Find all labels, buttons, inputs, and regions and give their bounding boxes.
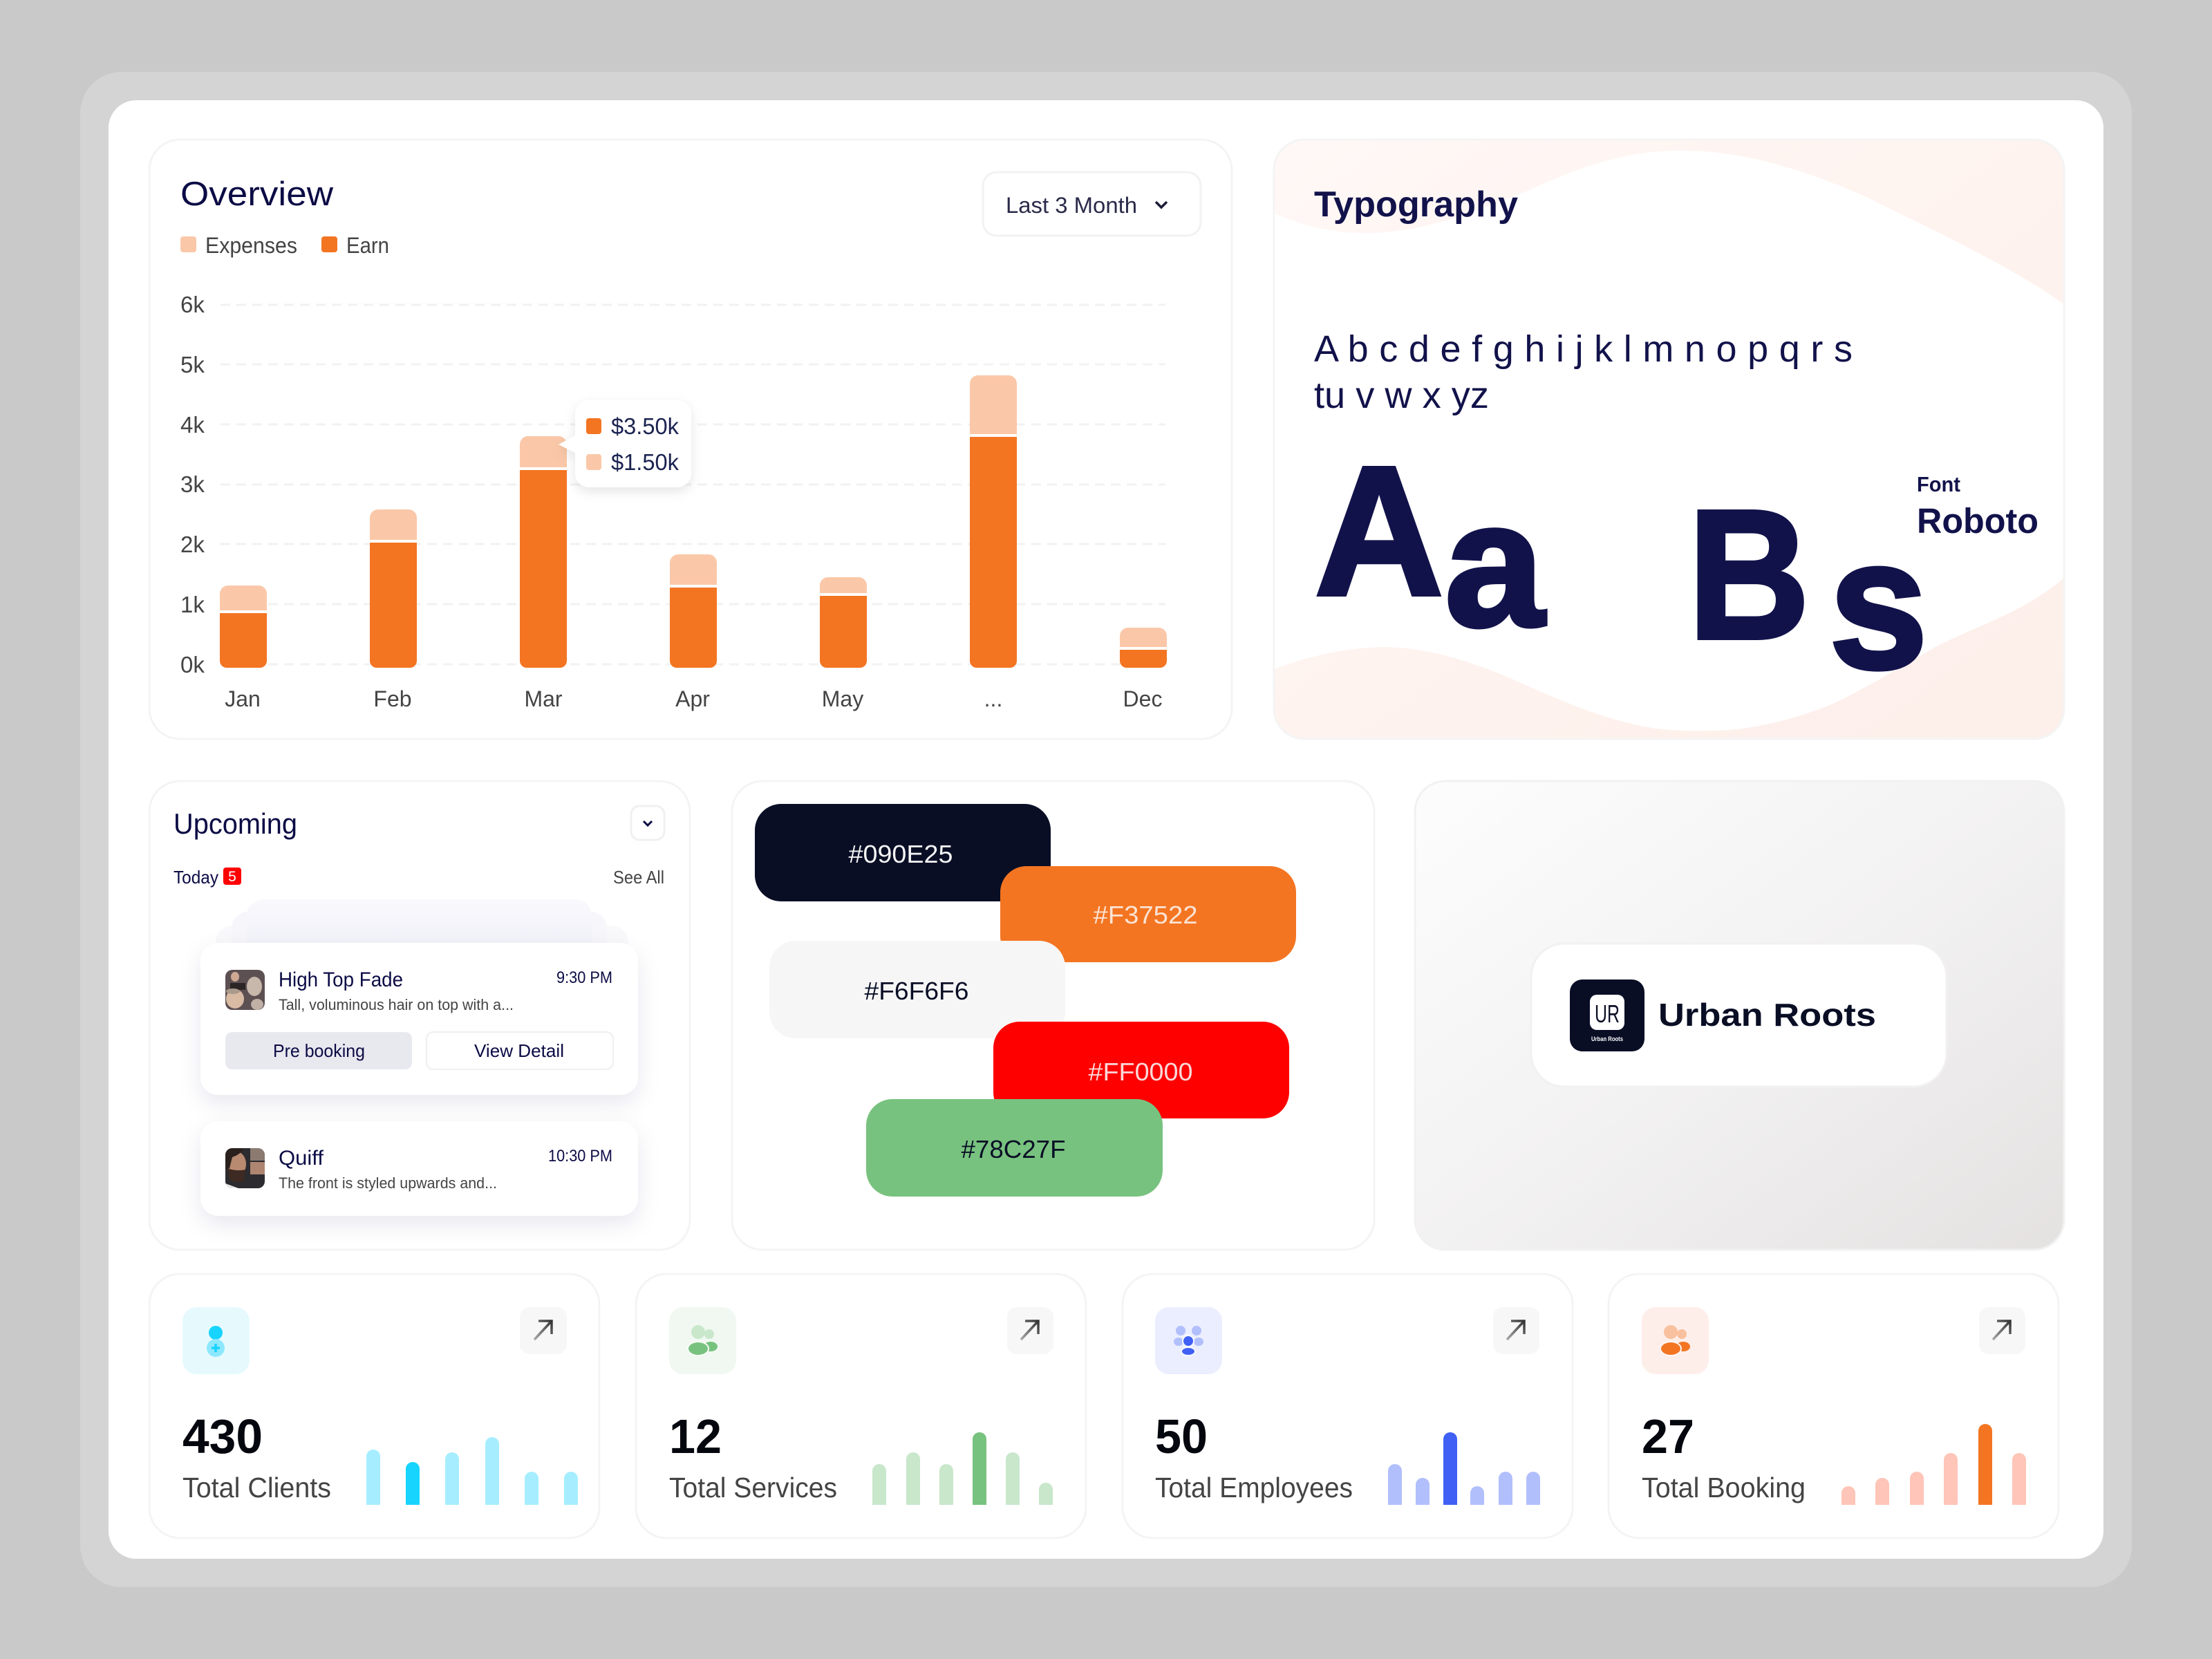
font name <box>1917 472 2038 541</box>
panel: colour palette <box>732 781 1374 1250</box>
chart grid and y axis: 4k <box>180 412 205 438</box>
x axis labels: May <box>822 686 863 711</box>
stat card: total booking <box>1609 1274 2059 1538</box>
card: quiff: 10:30 PM <box>548 1147 612 1165</box>
heading: Upcoming: Upcoming <box>174 807 297 840</box>
button: pre booking <box>225 1032 412 1069</box>
tooltip: $3.50k <box>611 413 679 439</box>
button: view detail: View Detail <box>474 1040 564 1061</box>
stat card: total services: 12 <box>669 1409 722 1463</box>
chart grid and y axis: 1k <box>180 592 205 617</box>
chart grid and y axis: 2k <box>180 532 205 557</box>
arrow button <box>1979 1307 2025 1354</box>
alphabet sample: tu v w x yz <box>1314 375 1489 416</box>
stacked card ghosts <box>216 899 628 981</box>
legend: Expenses <box>205 233 297 258</box>
alphabet sample: A b c d e f g h i j k l m n o p q r s <box>1314 328 1853 370</box>
chart grid and y axis: 6k <box>180 292 205 317</box>
swatch: red <box>993 1022 1289 1118</box>
card: high top fade: 9:30 PM <box>556 968 612 987</box>
stacked bars <box>220 375 1167 668</box>
panel: logo <box>1415 781 2064 1250</box>
heading: Overview: Overview <box>180 176 334 213</box>
x axis labels: ... <box>984 686 1002 711</box>
swatch: navy <box>755 804 1051 901</box>
icon: employees <box>1155 1307 1222 1374</box>
swatch: light gray <box>769 941 1065 1038</box>
stat card: total services: Total Services <box>669 1472 837 1503</box>
thumbnail: bearded man <box>225 1148 265 1188</box>
legend <box>180 233 389 258</box>
dropdown: last 3 month <box>983 172 1201 236</box>
stat card: total clients: 430 <box>182 1409 263 1463</box>
dropdown: last 3 month: Last 3 Month <box>1006 193 1137 218</box>
stat card: total clients: Total Clients <box>182 1472 331 1503</box>
mini bars <box>872 1432 1053 1505</box>
card: high top fade <box>200 943 638 1095</box>
logo card: Urban Roots <box>1658 997 1876 1033</box>
swatch: light gray: #F6F6F6 <box>864 977 969 1005</box>
icon: logo mark: UR <box>1595 1000 1620 1028</box>
arrow button <box>1493 1307 1539 1354</box>
mini bars <box>366 1437 578 1505</box>
panel: typography <box>1274 140 2064 739</box>
x axis labels <box>225 686 1162 711</box>
font name: Roboto <box>1917 501 2038 541</box>
specimen: Bs: B <box>1688 472 1810 677</box>
mini bars <box>1388 1432 1540 1505</box>
alphabet sample <box>1314 328 1853 416</box>
panel: overview chart <box>149 140 1232 739</box>
icon: logo mark: Urban Roots <box>1591 1035 1623 1042</box>
x axis labels: Feb <box>373 686 412 711</box>
see all link: See All <box>613 867 664 888</box>
arrow button <box>1007 1307 1053 1354</box>
stat card: total employees: Total Employees <box>1155 1472 1353 1503</box>
thumbnail: haircut collage <box>225 970 265 1010</box>
today label and count badge: 5 <box>228 869 236 885</box>
icon: client <box>182 1307 250 1374</box>
stat card: total clients <box>149 1274 599 1538</box>
stat card: total employees <box>1123 1274 1573 1538</box>
icon: logo mark <box>1570 980 1644 1051</box>
stat card: total services <box>636 1274 1086 1538</box>
stat card: total employees: 50 <box>1155 1409 1208 1463</box>
specimen: Aa <box>1315 429 1546 664</box>
chart grid and y axis: 0k <box>180 652 205 677</box>
specimen: Bs <box>1688 472 1928 707</box>
chart grid and y axis: 5k <box>180 352 205 377</box>
specimen: Aa: a <box>1445 464 1546 664</box>
arrow button <box>520 1307 567 1354</box>
chart grid and y axis: 3k <box>180 471 205 497</box>
heading: Typography: Typography <box>1314 185 1518 225</box>
panel: upcoming <box>149 781 690 1250</box>
mini bars <box>1841 1424 2026 1505</box>
stat card: total booking: 27 <box>1642 1409 1694 1463</box>
chart grid and y axis <box>180 292 1165 677</box>
specimen: Bs: s <box>1829 500 1928 707</box>
tooltip: $1.50k <box>611 449 679 475</box>
x axis labels: Mar <box>524 686 563 711</box>
tooltip <box>559 400 691 487</box>
x axis labels: Apr <box>675 686 710 711</box>
icon: services <box>669 1307 736 1374</box>
font name: Font <box>1917 472 1960 496</box>
card: quiff: The front is styled upwards and... <box>279 1174 497 1192</box>
card: quiff: Quiff <box>279 1147 324 1170</box>
swatch: orange: #F37522 <box>1094 901 1197 929</box>
specimen: Aa: A <box>1315 429 1443 634</box>
x axis labels: Jan <box>225 686 261 711</box>
card: quiff <box>200 1121 638 1216</box>
swatch: green: #78C27F <box>961 1135 1066 1163</box>
main white board <box>109 100 2103 1559</box>
swatch: orange <box>1000 866 1296 962</box>
today label and count badge: Today <box>174 867 218 888</box>
logo card <box>1531 944 1947 1087</box>
swatch: navy: #090E25 <box>849 840 953 868</box>
icon: booking <box>1642 1307 1709 1374</box>
stat card: total booking: Total Booking <box>1642 1472 1806 1503</box>
legend: Earn <box>346 233 389 258</box>
x axis labels: Dec <box>1123 686 1162 711</box>
card: high top fade: High Top Fade <box>279 968 403 991</box>
collapse button <box>631 806 664 840</box>
swatch: red: #FF0000 <box>1088 1058 1193 1086</box>
swatch: green <box>866 1099 1163 1197</box>
button: pre booking: Pre booking <box>273 1040 365 1061</box>
button: view detail <box>427 1032 613 1069</box>
card: high top fade: Tall, voluminous hair on top with a... <box>279 996 514 1013</box>
